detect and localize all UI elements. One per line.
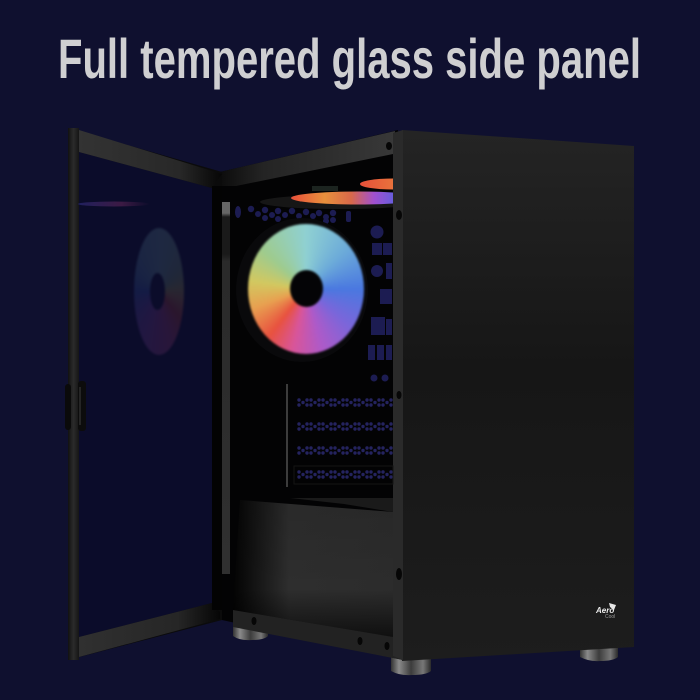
fan hub	[290, 270, 323, 307]
motherboard components	[368, 226, 392, 382]
door top rail	[79, 130, 222, 188]
case interior	[220, 130, 403, 660]
RGB fan	[248, 224, 364, 354]
shroud shading	[233, 500, 393, 637]
door glass	[79, 152, 212, 637]
foot: right rear	[580, 645, 618, 661]
brand logo	[595, 603, 616, 620]
shroud top lip	[290, 498, 393, 512]
shroud	[233, 500, 393, 637]
foot: door side rear	[233, 624, 268, 640]
top fan rear	[360, 178, 393, 190]
logo subtext: Cool	[605, 614, 615, 620]
glass reflection streak	[78, 202, 150, 206]
door handle	[65, 381, 86, 431]
logo wing	[609, 603, 616, 610]
top panel band	[220, 131, 395, 186]
RGB fan reflection on glass	[134, 228, 184, 355]
motherboard standoffs row	[235, 206, 351, 224]
foot: front center	[391, 655, 431, 675]
PCI slot covers	[286, 384, 393, 487]
case side panel	[402, 130, 634, 661]
top fan front	[260, 192, 393, 209]
door frame	[68, 128, 222, 660]
fan shroud shadow	[236, 218, 368, 362]
fan mount cables	[312, 186, 338, 191]
bottom rail	[233, 610, 403, 660]
door left rail	[68, 128, 79, 660]
door bottom rail	[79, 603, 220, 657]
interior cavity	[220, 130, 403, 660]
screw holes	[252, 142, 402, 650]
door hinge column	[212, 186, 222, 610]
logo wordmark: Aero	[595, 606, 614, 615]
reflection hub	[150, 273, 165, 310]
glass door	[65, 128, 222, 660]
left frame post	[222, 202, 230, 574]
front pillar	[393, 130, 403, 660]
